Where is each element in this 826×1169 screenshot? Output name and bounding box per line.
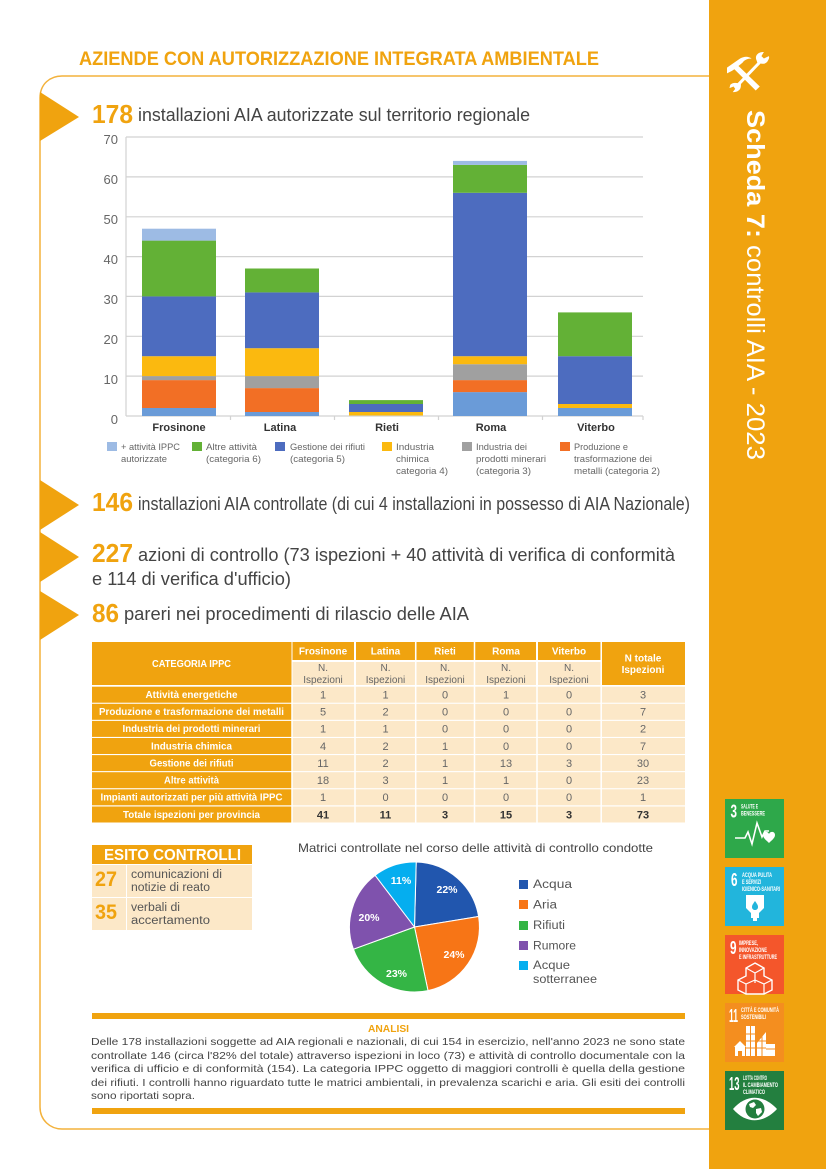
stat: 227 azioni di controllo: e 114 di verifica d'ufficio) — [92, 569, 291, 589]
chart legend: autorizzate — [121, 454, 167, 465]
y axis labels: 60 — [104, 172, 118, 187]
table header: N. — [501, 663, 511, 674]
table row: Totale ispezioni per provincia: Totale ispezioni per provincia — [123, 810, 260, 821]
table row: Produzione e trasformazione dei metalli: 2 — [382, 706, 389, 718]
table row: Industria dei prodotti minerari: 0 — [442, 724, 448, 736]
chart legend: + attività IPPC — [121, 442, 180, 453]
chart legend: Produzione e — [574, 442, 628, 453]
table row: Industria chimica — [92, 738, 685, 754]
icon: SDG 6: ACQUA PULITA — [742, 873, 772, 879]
panel: analisi: Delle 178 installazioni soggette ad AIA regionali e nazionali, di cui 154 in esercizio, nell'anno 2023 ne sono state — [91, 1036, 685, 1048]
table row: Gestione dei rifiuti: 13 — [500, 758, 512, 770]
chart legend: categoria 4) — [396, 466, 448, 477]
table row: Attività energetiche: 0 — [566, 690, 572, 702]
table row: Altre attività: 1 — [442, 775, 448, 787]
panel: analisi: controllate 146 (circa l'82% del totale) attraverso ispezioni in loco (73) e attività di controllo documentale con la — [91, 1050, 685, 1062]
icon: SDG 11: SOSTENIBILI — [741, 1015, 766, 1021]
icon: SDG 6: IGIENICO-SANITARI — [742, 887, 780, 893]
chart legend: Industria dei — [476, 442, 527, 453]
stat: 178 installazioni: installazioni AIA autorizzate sul territorio regionale — [138, 105, 530, 125]
table row: Produzione e trasformazione dei metalli: 5 — [320, 706, 326, 718]
table header: Ispezioni — [622, 665, 665, 676]
stat: 227 azioni di controllo: 227 — [92, 538, 133, 568]
table row: Impianti autorizzati per più attività IPPC — [92, 789, 685, 805]
pie chart: 22% — [436, 884, 458, 896]
stat: 178 installazioni — [92, 99, 530, 129]
table row: Impianti autorizzati per più attività IPPC: 1 — [320, 792, 326, 804]
y axis labels — [104, 132, 118, 427]
table row: Gestione dei rifiuti: 3 — [566, 758, 572, 770]
arrow: 146 marker — [40, 480, 79, 530]
pie legend: Rumore — [533, 940, 576, 952]
table row: Produzione e trasformazione dei metalli: 0 — [503, 706, 509, 718]
table header: Rieti — [434, 646, 456, 658]
table row: Produzione e trasformazione dei metalli: Produzione e trasformazione dei metalli — [99, 707, 284, 718]
chart legend: chimica — [396, 454, 430, 465]
table row: Altre attività: 3 — [382, 775, 389, 787]
table row: Produzione e trasformazione dei metalli: 0 — [442, 706, 448, 718]
table header — [92, 642, 685, 686]
icon: SDG 11 — [725, 1003, 784, 1062]
table row: Attività energetiche: Attività energetiche — [146, 690, 238, 701]
table row: Attività energetiche: 0 — [442, 690, 448, 702]
table row: Impianti autorizzati per più attività IPPC: 0 — [503, 792, 509, 804]
bar: Frosinone — [142, 229, 216, 416]
table row: Industria dei prodotti minerari: 1 — [320, 724, 326, 736]
panel: analisi: dei rifiuti. I controlli hanno riguardato tutte le matrici ambientali, in prevalenza scarichi e aria. Gli esiti dei controlli — [91, 1077, 685, 1089]
table row: Altre attività: 0 — [566, 775, 572, 787]
table header: Ispezioni — [366, 675, 405, 686]
table row: Gestione dei rifiuti: 1 — [442, 758, 448, 770]
pie legend — [519, 879, 597, 986]
chart legend: metalli (categoria 2) — [574, 466, 660, 477]
bar: Latina — [245, 268, 319, 416]
esito row: 27 comunicazioni: comunicazioni di — [131, 869, 222, 881]
table header: Ispezioni — [486, 675, 526, 686]
table row: Industria dei prodotti minerari: 2 — [640, 724, 646, 736]
esito row: 27 comunicazioni: notizie di reato — [131, 882, 210, 894]
table row: Altre attività: 23 — [637, 775, 649, 787]
table row: Gestione dei rifiuti: 11 — [317, 758, 329, 770]
main title: AZIENDE CON AUTORIZZAZIONE INTEGRATA AMBIENTALE — [79, 49, 599, 70]
chart legend — [107, 442, 660, 477]
table row: Industria chimica: 1 — [442, 741, 448, 753]
sidebar title: controlli AIA - 2023 — [741, 245, 769, 460]
stat: 86 pareri: 86 — [92, 598, 119, 628]
table row: Produzione e trasformazione dei metalli: 7 — [640, 706, 646, 718]
icon: SDG 3: SALUTE E — [741, 804, 758, 810]
category labels: Rieti — [375, 422, 399, 434]
table row: Industria chimica: 0 — [566, 741, 572, 753]
pie legend: Acqua — [533, 879, 573, 891]
chart legend: Altre attività — [206, 442, 258, 453]
y axis labels: 0 — [111, 412, 118, 427]
chart legend: prodotti minerari — [476, 454, 546, 465]
table row: Totale ispezioni per provincia: 3 — [442, 810, 448, 822]
table row: Totale ispezioni per provincia: 11 — [380, 810, 391, 822]
table row: Attività energetiche: 1 — [382, 690, 389, 702]
chart legend: (categoria 5) — [290, 454, 345, 465]
category labels: Roma — [476, 422, 507, 434]
icon: SDG 9: INNOVAZIONE — [739, 948, 767, 954]
y axis labels: 40 — [104, 252, 118, 267]
table row: Altre attività: 18 — [317, 775, 329, 787]
table header: CATEGORIA IPPC — [152, 659, 231, 670]
bar: Viterbo — [558, 312, 632, 416]
table row: Industria chimica: 2 — [382, 741, 389, 753]
pie legend: Rifiuti — [533, 920, 565, 932]
y axis labels: 50 — [104, 212, 118, 227]
stat: 86 pareri: pareri nei procedimenti di rilascio delle AIA — [124, 604, 469, 624]
icon: SDG 6: 6 — [731, 870, 738, 890]
table header: Ispezioni — [303, 675, 343, 686]
y axis labels: 70 — [104, 132, 118, 147]
table row: Industria chimica: Industria chimica — [151, 742, 232, 752]
chart legend: Gestione dei rifiuti — [290, 442, 365, 453]
table row: Gestione dei rifiuti: Gestione dei rifiuti — [150, 758, 234, 770]
sidebar title — [741, 110, 769, 460]
icon: SDG 9: 9 — [730, 938, 736, 958]
panel: analisi: sono riportati sopra. — [91, 1090, 195, 1102]
icon: hammer and wrench — [727, 52, 769, 92]
table row: Attività energetiche: 1 — [320, 690, 326, 702]
chart legend: (categoria 6) — [206, 454, 261, 465]
table row: Impianti autorizzati per più attività IPPC: Impianti autorizzati per più attività IPPC — [100, 792, 282, 804]
icon: SDG 9: IMPRESE, — [739, 941, 758, 947]
category labels: Viterbo — [577, 422, 615, 434]
table row: Impianti autorizzati per più attività IPPC: 1 — [640, 792, 646, 804]
arrow: 227 marker — [40, 532, 79, 582]
table header: N. — [440, 663, 450, 674]
table row: Totale ispezioni per provincia: 41 — [317, 810, 329, 822]
category labels: Latina — [264, 422, 297, 434]
esito row: 35 verbali: 35 — [95, 901, 117, 924]
y axis labels: 10 — [104, 372, 118, 387]
panel: esito controlli — [92, 845, 252, 930]
table row: Gestione dei rifiuti: 2 — [382, 758, 389, 770]
table row: Industria dei prodotti minerari: 0 — [566, 724, 572, 736]
pie legend: Aria — [533, 900, 558, 912]
y axis labels: 30 — [104, 292, 118, 307]
table row: Industria dei prodotti minerari: 1 — [382, 724, 389, 736]
panel: right sidebar — [709, 0, 826, 1169]
table header: Ispezioni — [425, 675, 465, 686]
table row: Industria chimica: 7 — [640, 741, 646, 753]
icon: SDG 11: 11 — [729, 1006, 738, 1026]
category labels: Frosinone — [152, 422, 206, 434]
stat: 146 installazioni controllate: installazioni AIA controllate (di cui 4 installazioni in possesso di AIA Nazionale) — [138, 494, 690, 514]
pie legend: Acque — [533, 960, 570, 972]
table row: Totale ispezioni per provincia: 15 — [500, 810, 512, 822]
chart legend: (categoria 3) — [476, 466, 531, 477]
arrow: 86 marker — [40, 591, 79, 640]
sidebar title: Scheda 7: — [741, 110, 769, 238]
panel: analisi: verifica di ufficio e di conformità (154). La categoria IPPC oggetto di maggiori controlli è quella della gestione — [91, 1063, 685, 1075]
table row: Altre attività — [92, 772, 685, 788]
chart legend: Industria — [396, 442, 435, 453]
table row: Altre attività: 1 — [503, 775, 509, 787]
table row: Gestione dei rifiuti: 30 — [637, 758, 649, 770]
table header: Viterbo — [552, 646, 586, 658]
y axis labels: 20 — [104, 332, 118, 347]
stat: 146 installazioni controllate: 146 — [92, 487, 133, 517]
table row: Totale ispezioni per provincia: 3 — [566, 810, 572, 822]
esito row: 35 verbali — [92, 898, 252, 930]
panel: outline frame — [40, 76, 709, 1129]
pie chart: 23% — [386, 968, 408, 980]
table row: Industria chimica: 0 — [503, 741, 509, 753]
pie chart — [349, 862, 479, 992]
pie chart: 11% — [391, 875, 412, 887]
esito row: 27 comunicazioni — [92, 865, 252, 897]
panel: analisi: ANALISI — [368, 1023, 409, 1035]
table row: Totale ispezioni per provincia — [92, 806, 685, 822]
table row: Produzione e trasformazione dei metalli: 0 — [566, 706, 572, 718]
stacked bar chart — [104, 132, 643, 434]
table header: N totale — [625, 654, 662, 664]
icon: SDG 9 — [725, 935, 784, 994]
table row: Attività energetiche — [92, 687, 685, 703]
table header: N. — [318, 663, 328, 674]
icon: SDG 13: IL CAMBIAMENTO — [743, 1083, 778, 1089]
table row: Altre attività: Altre attività — [164, 776, 219, 786]
table row: Attività energetiche: 1 — [503, 690, 509, 702]
stat: 227 azioni di controllo: azioni di controllo (73 ispezioni + 40 attività di verifica di conformità — [138, 545, 676, 565]
icon: SDG 9: E INFRASTRUTTURE — [739, 955, 777, 961]
icon: SDG 13: 13 — [729, 1074, 740, 1094]
esito row: 35 verbali: verbali di — [131, 902, 180, 914]
esito row: 27 comunicazioni: 27 — [95, 868, 117, 891]
chart legend: trasformazione dei — [574, 454, 652, 465]
table header: Roma — [492, 646, 520, 658]
pie chart title: Matrici controllate nel corso delle attività di controllo condotte — [298, 841, 653, 855]
stat: 178 installazioni: 178 — [92, 99, 133, 129]
table row: Attività energetiche: 3 — [640, 690, 646, 702]
table row: Produzione e trasformazione dei metalli — [92, 704, 685, 720]
table header: N. — [380, 663, 390, 674]
stat: 227 azioni di controllo — [92, 538, 676, 589]
icon: SDG 3: 3 — [730, 802, 737, 822]
table header: Frosinone — [299, 646, 348, 658]
icon: SDG 13: CLIMATICO — [743, 1090, 765, 1096]
icon: SDG 13: LOTTA CONTRO — [743, 1076, 767, 1082]
icon: SDG 6: E SERVIZI — [742, 880, 761, 886]
table row: Totale ispezioni per provincia: 73 — [637, 810, 649, 822]
icon: SDG 3 — [725, 799, 784, 858]
icon: SDG 6 — [725, 867, 784, 926]
arrow: 178 marker — [40, 92, 79, 141]
bar: Roma — [453, 161, 527, 416]
icon: SDG 3: BENESSERE — [741, 812, 765, 818]
table row: Impianti autorizzati per più attività IPPC: 0 — [442, 792, 448, 804]
stat: 86 pareri — [92, 598, 469, 628]
panel: analisi — [91, 1013, 685, 1114]
table row: Gestione dei rifiuti — [92, 755, 685, 771]
table row: Industria dei prodotti minerari — [92, 721, 685, 737]
icon: SDG 11: CITTÀ E COMUNITÀ — [741, 1007, 779, 1014]
icon: SDG 13 — [725, 1071, 784, 1130]
table row: Impianti autorizzati per più attività IPPC: 0 — [566, 792, 572, 804]
panel: esito controlli: ESITO CONTROLLI — [104, 847, 241, 864]
table header: Ispezioni — [549, 675, 589, 686]
table: ispezioni per categoria IPPC e provincia — [92, 642, 685, 823]
table header: N. — [564, 663, 574, 674]
table row: Impianti autorizzati per più attività IPPC: 0 — [382, 792, 389, 804]
pie legend: sotterranee — [533, 974, 597, 986]
table row: Industria chimica: 4 — [320, 741, 326, 753]
esito row: 35 verbali: accertamento — [131, 915, 210, 927]
table header: Latina — [371, 646, 401, 658]
table row: Industria dei prodotti minerari: 0 — [503, 724, 509, 736]
bar: Rieti — [349, 400, 423, 416]
category labels — [152, 422, 615, 434]
pie chart: 24% — [443, 949, 465, 961]
table row: Industria dei prodotti minerari: Industria dei prodotti minerari — [122, 724, 261, 735]
stat: 146 installazioni controllate — [92, 487, 690, 517]
table column separators — [292, 642, 601, 823]
pie chart: 20% — [358, 912, 380, 924]
